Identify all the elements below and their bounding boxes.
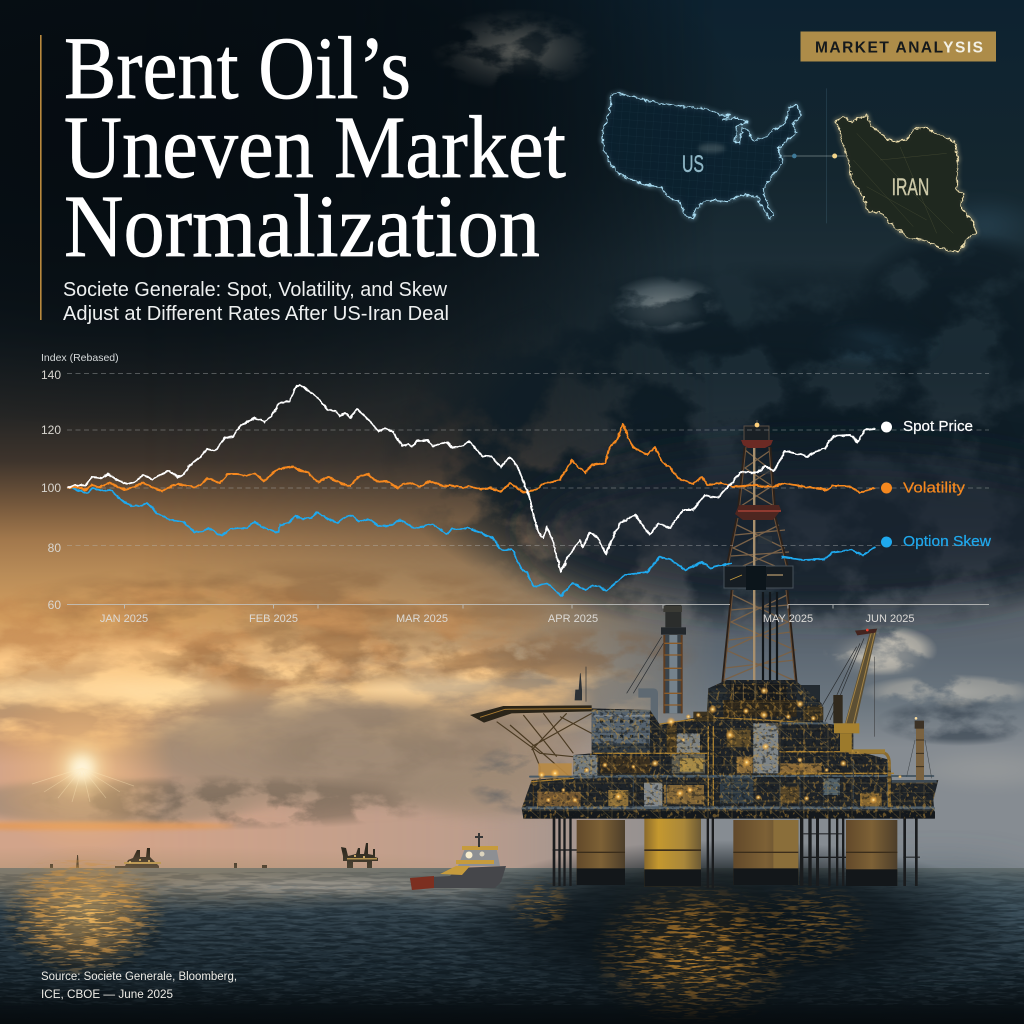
x axis labels: FEB 2025 — [249, 613, 298, 625]
distant platform centre — [341, 843, 378, 869]
title: Brent Oil’s — [64, 20, 411, 118]
y axis labels: 80 — [48, 541, 61, 555]
source note: ICE, CBOE — June 2025 — [41, 989, 173, 1001]
subtitle: Societe Generale: Spot, Volatility, and Skew — [63, 279, 448, 301]
title — [64, 20, 566, 276]
series: volatility — [67, 424, 875, 493]
line chart — [41, 352, 992, 625]
x axis labels: JUN 2025 — [866, 613, 914, 625]
oil platform — [470, 420, 940, 888]
y axis labels: 120 — [41, 423, 61, 437]
title: Uneven Market — [64, 99, 566, 197]
deck lights — [538, 687, 902, 804]
crane — [822, 629, 877, 752]
y axis labels — [41, 368, 61, 612]
source note — [41, 971, 237, 1001]
upper equipment deck — [693, 683, 823, 722]
axis title: Index (Rebased) — [41, 352, 119, 364]
legend: volatility — [881, 480, 966, 496]
legend: option skew: Option Skew — [903, 534, 992, 550]
sun — [0, 676, 174, 860]
work platform — [724, 566, 793, 588]
label: Iran: IRAN — [892, 174, 929, 201]
crown block — [744, 426, 769, 441]
map: United States — [603, 93, 802, 219]
x axis labels — [100, 613, 914, 625]
gridlines — [67, 374, 989, 546]
label: US: US — [682, 151, 704, 178]
y axis labels: 100 — [41, 481, 61, 495]
sea: light ripples — [0, 885, 1024, 1005]
heading accent rule — [40, 35, 42, 320]
subtitle — [63, 279, 449, 325]
connector between maps — [783, 88, 853, 223]
clouds: dark storm bank — [380, 8, 1024, 640]
series: option skew — [72, 488, 875, 596]
map: US and Iran — [603, 88, 977, 252]
accommodation modules — [573, 710, 840, 807]
topside silhouette — [522, 680, 938, 818]
y axis labels: 60 — [48, 598, 61, 612]
lit interiors — [537, 725, 882, 808]
map: Iran — [837, 115, 977, 252]
pontoon columns — [577, 815, 897, 887]
sun reflection — [14, 854, 154, 970]
pipework and decks — [527, 717, 933, 810]
x axis — [67, 604, 989, 608]
background: sea — [0, 840, 1024, 1024]
legend: spot price: Spot Price — [903, 419, 973, 435]
rig surface detail — [520, 680, 940, 820]
x axis labels: APR 2025 — [548, 613, 598, 625]
distant platform left — [50, 848, 267, 869]
platform reflection — [505, 875, 875, 1024]
vessel — [410, 833, 506, 890]
platform shadow on water — [440, 840, 1020, 1010]
x axis labels: MAY 2025 — [763, 613, 813, 625]
subtitle: Adjust at Different Rates After US-Iran Deal — [63, 303, 449, 325]
sea legs and bracing — [553, 817, 920, 888]
badge: market analysis — [800, 32, 996, 62]
vent stack right — [892, 717, 937, 783]
sea: dark ripples — [0, 872, 1024, 1024]
sea: silver sheen — [100, 873, 540, 899]
y axis labels: 140 — [41, 368, 61, 382]
title: Normalization — [64, 178, 540, 276]
x axis labels: MAR 2025 — [396, 613, 448, 625]
derrick tower — [722, 420, 797, 692]
helideck and truss — [470, 667, 592, 807]
flare tower — [627, 603, 686, 734]
x axis labels: JAN 2025 — [100, 613, 148, 625]
series: spot price — [67, 385, 875, 572]
source note: Source: Societe Generale, Bloomberg, — [41, 971, 237, 983]
legend: volatility: Volatility — [903, 480, 966, 496]
mid platform — [735, 505, 781, 520]
badge: market analysis: MARKET ANALYSIS — [815, 40, 983, 56]
clouds: sunset layers — [0, 560, 1024, 830]
